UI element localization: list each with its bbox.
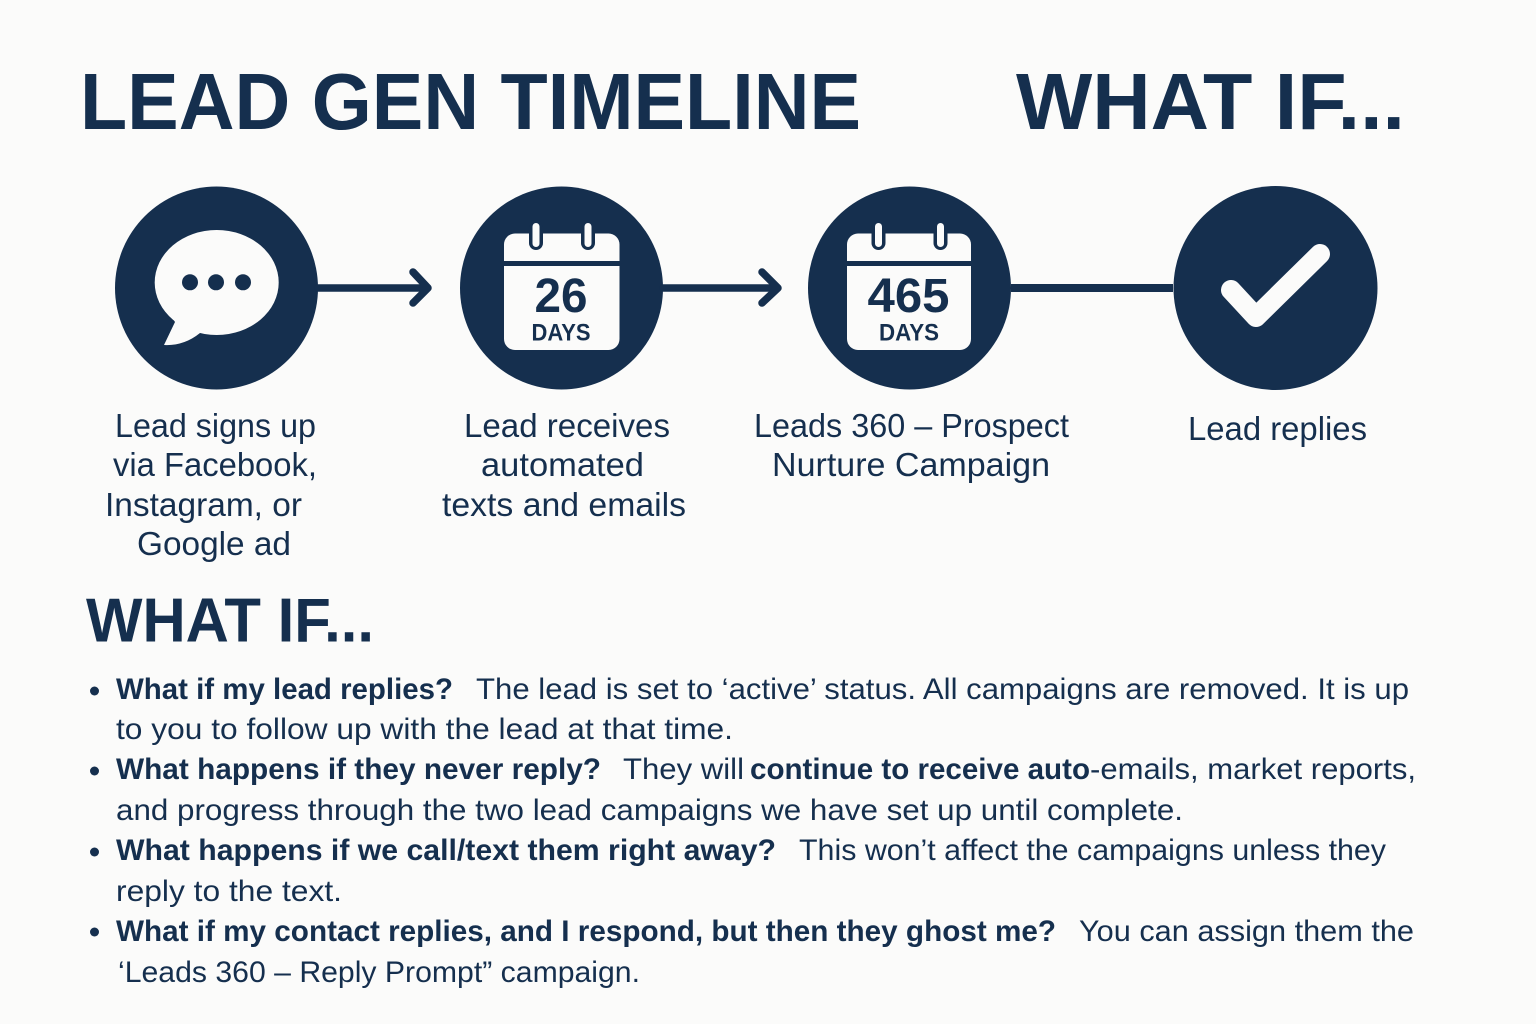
text: step 1 caption: via Facebook, [113,446,317,483]
step 4: lead replies [1174,186,1378,447]
text: step 2 caption: texts and emails [442,486,686,523]
bullet 3: call or text right away: What happens if we call/text them right away? [116,834,776,867]
text: step 1 caption [105,407,317,562]
text: step 2 caption: Lead receives [464,407,670,444]
text: step 4 caption: Lead replies [1188,410,1367,447]
bullet 4: contact ghosts [90,915,1414,989]
bullet 1: lead replies: to you to follow up with the lead at that time. [116,713,733,746]
text: step 1 caption: Google ad [137,525,291,562]
icon: calendar 465 days: DAYS [879,320,939,346]
bullet 4: contact ghosts: ‘Leads 360 – Reply Prompt” campaign. [118,956,640,989]
arrow: step 1 to step 2 [318,272,428,303]
bullet 2: never reply: and progress through the two lead campaigns we have set up until complete. [116,794,1183,827]
icon: chat bubble [115,186,318,390]
text: step 1 caption: Lead signs up [115,407,316,444]
text: step 2 caption: automated [481,446,644,483]
bullet 3: call or text right away: reply to the text. [116,875,342,908]
icon: calendar 26 days: DAYS [532,320,590,346]
bullet 2: never reply: They will [623,753,744,786]
bullet 1: lead replies: The lead is set to ‘active’ status. All campaigns are removed. It is up [476,673,1409,706]
icon: calendar 465 days: 465 [868,270,950,323]
arrow: step 2 to step 3 [663,272,778,303]
text: step 2 caption [442,407,686,523]
bullet 1: lead replies [90,673,1409,746]
icon: calendar 26 days: 26 [534,270,588,323]
bullet 2: never reply: continue to receive auto [750,753,1090,786]
bullet 2: never reply [90,753,1416,827]
connector: step 3 to step 4 [1011,284,1173,292]
bullet 1: lead replies: What if my lead replies? [116,673,453,706]
bullet 3: call or text right away [90,834,1386,908]
bullet 4: contact ghosts: What if my contact replies, and I respond, but then they ghost me? [116,915,1056,948]
bullet 2: never reply: -emails, market reports, [1090,753,1416,786]
title: lead gen timeline: LEAD GEN TIMELINE [80,57,861,146]
bullet 2: never reply: What happens if they never reply? [116,753,601,786]
step 2: automated texts and emails [442,186,686,523]
step 1: lead signs up [105,186,318,562]
step 3: leads 360 prospect nurture campaign [754,186,1069,483]
text: step 3 caption: Nurture Campaign [772,446,1050,483]
heading: what if section: WHAT IF... [86,586,374,656]
bullet 4: contact ghosts: You can assign them the [1079,915,1414,948]
text: step 3 caption: Leads 360 – Prospect [754,407,1069,444]
bullet 3: call or text right away: This won’t affect the campaigns unless they [799,834,1386,867]
icon: check mark [1174,186,1378,390]
icon: calendar 26 days [460,186,663,390]
icon: calendar 465 days [808,186,1011,390]
text: step 1 caption: Instagram, or [105,486,302,523]
heading: what if top right: WHAT IF... [1016,57,1405,146]
list: what if questions [90,673,1416,989]
text: step 3 caption [754,407,1069,483]
